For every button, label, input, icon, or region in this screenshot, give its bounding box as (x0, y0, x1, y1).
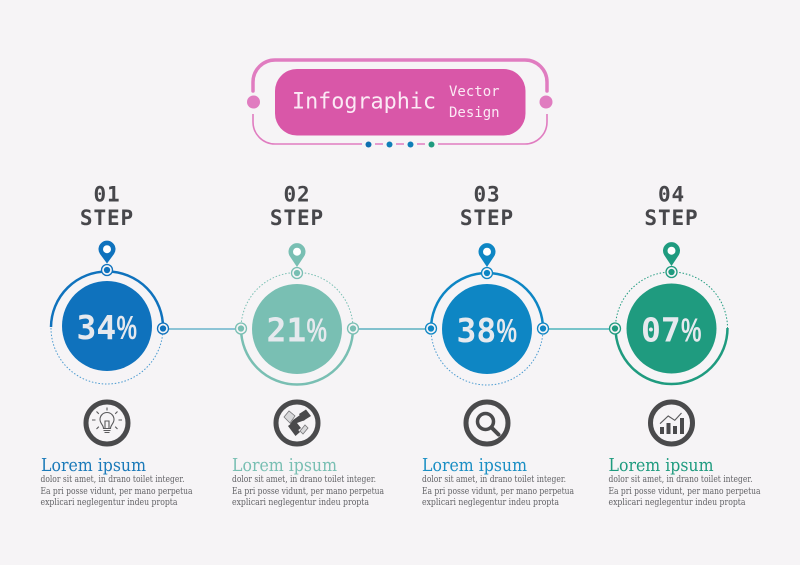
step 3 label: 03 (473, 182, 501, 206)
step 4 heading: Lorem ipsum (608, 455, 714, 476)
step 1 description: dolor sit amet, in drano toilet integer. (40, 475, 185, 485)
step 1 solid arc (51, 271, 163, 328)
step 1 dotted ring (51, 328, 163, 384)
step 4 (608, 182, 761, 508)
step 1 percentage: % (116, 309, 137, 346)
banner bottom dots (366, 142, 434, 148)
step 3 filled circle (442, 284, 532, 374)
step 3 label: STEP (460, 206, 514, 230)
step 4 nodes (610, 266, 677, 334)
step 3 description: explicari neglegentur indeu propta (422, 498, 560, 508)
step 2 solid arc (241, 328, 353, 384)
step 2 description: explicari neglegentur indeu propta (232, 498, 370, 508)
step 2 nodes (236, 268, 358, 334)
banner pill (275, 69, 526, 136)
step 2 heading: Lorem ipsum (232, 455, 337, 476)
step 4 dotted ring (616, 272, 728, 328)
step 1 label: STEP (80, 206, 134, 230)
step 2 dotted ring (241, 272, 353, 328)
step 4 description: dolor sit amet, in drano toilet integer. (608, 475, 753, 485)
banner side dots (247, 96, 552, 108)
step 1 pin (98, 241, 116, 264)
step 4 filled circle (626, 284, 716, 374)
step 3 percentage: % (496, 312, 517, 349)
step 4 description: explicari neglegentur indeu propta (608, 498, 746, 508)
step 2 label: STEP (270, 206, 324, 230)
step 1 nodes (102, 264, 168, 334)
step 2 icon: handshake (276, 402, 318, 444)
step 3 description: Ea pri posse vidunt, per mano perpetua (422, 487, 575, 497)
step 3 dotted ring (431, 329, 543, 385)
step 2 pin (288, 243, 306, 267)
step 4 icon: bar chart (650, 402, 692, 444)
title banner (247, 60, 552, 148)
banner outer frame (253, 60, 547, 144)
banner subtitle line 2: Design (449, 105, 500, 121)
banner subtitle line 1: Vector (449, 84, 500, 100)
step 4 label: STEP (644, 206, 699, 230)
step 1 (40, 182, 193, 508)
banner title text: Infographic (292, 90, 436, 114)
step 3 nodes (426, 268, 548, 334)
step 4 pin (663, 242, 680, 266)
step 1 heading: Lorem ipsum (41, 455, 146, 476)
step 3 description: dolor sit amet, in drano toilet integer. (422, 475, 566, 485)
step 1 percentage: 34 (76, 308, 116, 347)
step 4 percentage: 07 (641, 310, 681, 350)
step 2 description: Ea pri posse vidunt, per mano perpetua (232, 487, 385, 497)
step 2 percentage: % (306, 312, 327, 348)
step 1 description: Ea pri posse vidunt, per mano perpetua (40, 487, 193, 497)
step 4 percentage: % (681, 312, 702, 348)
step 1 description: explicari neglegentur indeu propta (40, 498, 178, 508)
connector lines (163, 328, 615, 330)
step 2 (232, 182, 385, 508)
step 3 solid arc (431, 273, 543, 329)
step 3 percentage: 38 (456, 311, 496, 350)
step 3 heading: Lorem ipsum (422, 455, 527, 476)
step 4 label: 04 (658, 182, 685, 206)
step 3 icon: magnifier (466, 402, 508, 444)
step 1 filled circle (62, 281, 152, 371)
step 3 pin (479, 243, 496, 267)
step 1 icon: light bulb (86, 402, 128, 444)
step 2 description: dolor sit amet, in drano toilet integer. (232, 475, 376, 485)
step 2 label: 02 (283, 182, 311, 206)
step 2 percentage: 21 (266, 310, 306, 350)
step 2 filled circle (252, 284, 342, 374)
step 4 solid arc (616, 328, 728, 384)
step 4 description: Ea pri posse vidunt, per mano perpetua (608, 487, 761, 497)
step 3 (422, 182, 575, 508)
step 1 label: 01 (93, 182, 121, 206)
